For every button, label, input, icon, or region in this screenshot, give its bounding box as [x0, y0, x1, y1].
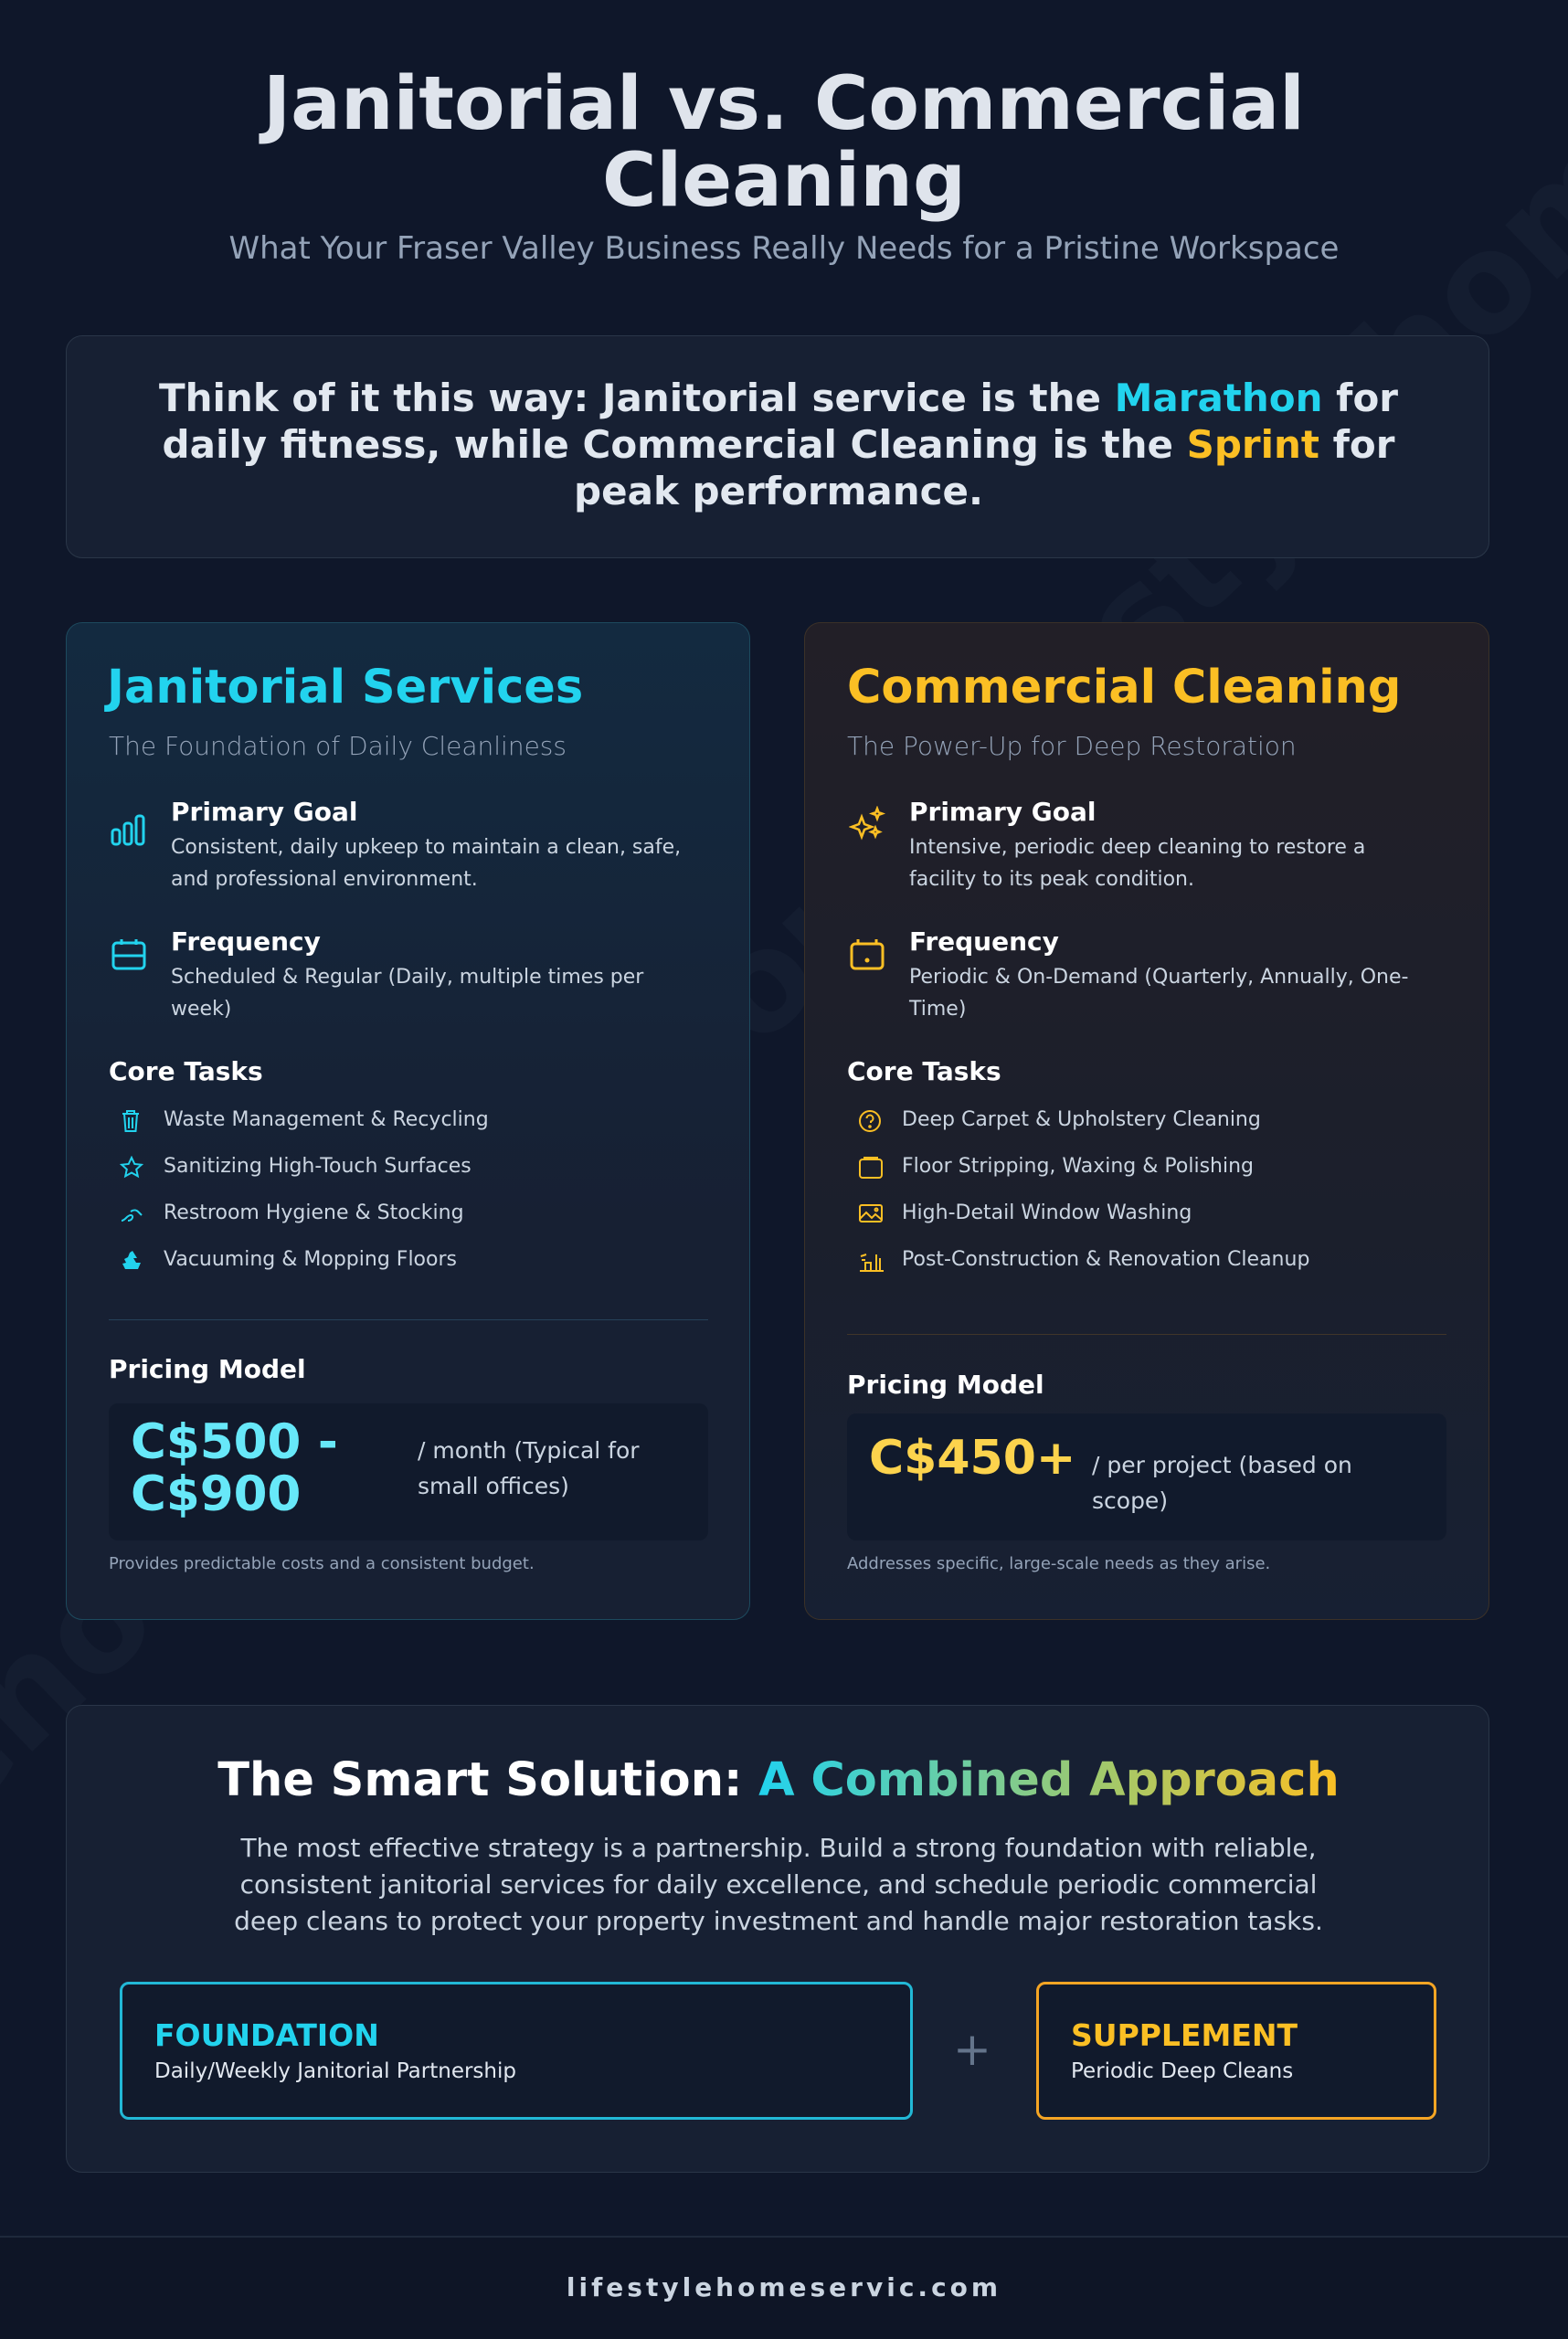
box: supplement: SUPPLEMENT — [1071, 2017, 1298, 2053]
task list: Vacuuming & Mopping Floors — [164, 1248, 457, 1271]
callout: analogy — [66, 335, 1489, 558]
price box: C$900 — [131, 1466, 301, 1522]
footer — [0, 2236, 1568, 2339]
primary goal: Intensive, periodic deep cleaning to restore a facility to its peak condition. — [909, 836, 1365, 891]
footer: lifestylehomeservic.com — [567, 2272, 1001, 2302]
panel: janitorial — [66, 622, 750, 1620]
box: foundation — [120, 1982, 913, 2120]
box: supplement — [1036, 1982, 1436, 2120]
frequency: Scheduled & Regular (Daily, multiple times per week) — [171, 966, 643, 1021]
callout: analogy: Think of it this way: Janitorial service is the Marathon for daily fitness, while Commercial Cleaning is the Sprint for peak performance. — [159, 376, 1398, 513]
task list: Waste Management & Recycling — [164, 1108, 489, 1131]
price box: / month (Typical for — [418, 1437, 640, 1464]
task list: High-Detail Window Washing — [902, 1201, 1192, 1224]
price box: C$500 - — [131, 1414, 338, 1470]
price box: / per project (based on — [1092, 1452, 1352, 1478]
frequency: Periodic & On-Demand (Quarterly, Annually, One-Time) — [909, 966, 1408, 1021]
price box: scope) — [1092, 1487, 1168, 1514]
title: Janitorial vs. Commercial — [263, 61, 1305, 147]
task list: Floor Stripping, Waxing & Polishing — [902, 1155, 1254, 1178]
primary goal: Primary Goal — [909, 797, 1097, 827]
task list — [859, 1108, 1309, 1272]
panel: commercial — [804, 622, 1489, 1620]
subtitle: What Your Fraser Valley Business Really Needs for a Pristine Workspace — [229, 230, 1339, 267]
pricing heading: Pricing Model — [109, 1354, 306, 1384]
frequency: Frequency — [909, 926, 1059, 957]
subheading: The Foundation of Daily Cleanliness — [109, 731, 567, 761]
title — [259, 61, 1305, 224]
icon: plus: + — [953, 2023, 991, 2076]
panel: combined approach — [66, 1705, 1489, 2173]
price box: C$450+ — [869, 1431, 1075, 1486]
task list: Sanitizing High-Touch Surfaces — [164, 1155, 471, 1178]
icon: sparkles — [849, 806, 885, 841]
task list: Post-Construction & Renovation Cleanup — [902, 1248, 1309, 1271]
box: supplement: Periodic Deep Cleans — [1071, 2059, 1293, 2083]
icon: calendar — [850, 939, 885, 970]
icon: calendar — [111, 939, 146, 970]
pricing heading: Pricing Model — [847, 1370, 1044, 1400]
task list: Deep Carpet & Upholstery Cleaning — [902, 1108, 1261, 1131]
price box: small offices) — [418, 1473, 569, 1499]
primary goal: Primary Goal — [171, 797, 358, 827]
heading: Janitorial Services — [107, 661, 583, 714]
frequency — [850, 926, 1408, 1021]
price box — [847, 1413, 1446, 1540]
task list — [120, 1108, 489, 1271]
primary goal — [111, 797, 681, 891]
frequency — [111, 926, 643, 1021]
title: Cleaning — [602, 138, 966, 224]
subheading: The Power-Up for Deep Restoration — [847, 731, 1297, 761]
core tasks heading: Core Tasks — [847, 1056, 1001, 1086]
box: foundation: FOUNDATION — [154, 2017, 379, 2053]
frequency: Frequency — [171, 926, 321, 957]
task list: Restroom Hygiene & Stocking — [164, 1201, 464, 1224]
heading: Commercial Cleaning — [847, 661, 1401, 714]
footnote: Provides predictable costs and a consistent budget. — [109, 1554, 535, 1573]
primary goal — [849, 797, 1365, 891]
heading: The Smart Solution: A Combined Approach — [217, 1753, 1340, 1807]
primary goal: Consistent, daily upkeep to maintain a clean, safe, and professional environment. — [171, 836, 681, 891]
paragraph: The most effective strategy is a partnership. Build a strong foundation with reliable, consistent janitorial services for daily excellence, and schedule periodic commercial deep cleans to protect your property investment and handle major restoration tasks. — [234, 1833, 1323, 1936]
box: foundation: Daily/Weekly Janitorial Partnership — [154, 2059, 516, 2083]
price box — [109, 1403, 708, 1540]
icon: bar chart — [111, 815, 144, 846]
core tasks heading: Core Tasks — [109, 1056, 263, 1086]
footnote: Addresses specific, large-scale needs as they arise. — [847, 1554, 1270, 1573]
